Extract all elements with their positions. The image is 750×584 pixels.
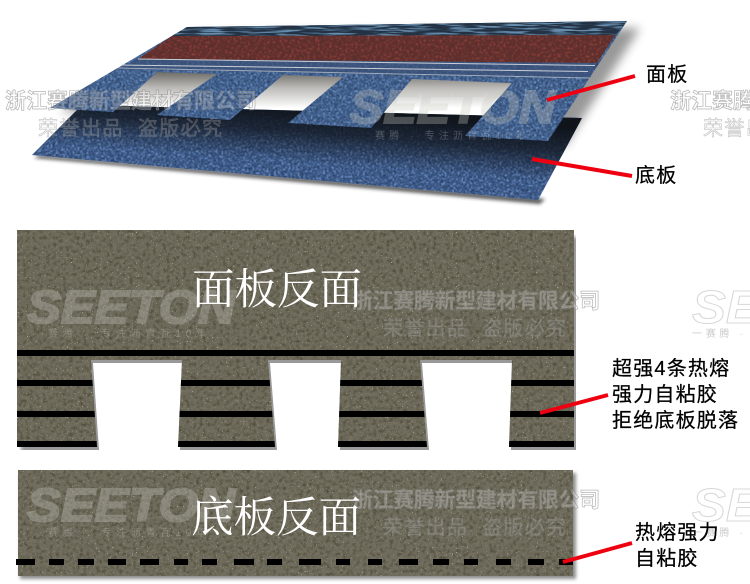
label: base sheet: 底板: [635, 164, 677, 187]
dark upper band: [172, 21, 627, 36]
panel: top sheet reverse side: [17, 230, 579, 453]
watermarks: 荣誉出品 盗版必究: [383, 516, 566, 539]
base sheet: [32, 105, 582, 204]
gap behind cut-outs: [100, 70, 520, 120]
top sheet drop shadow: [60, 28, 640, 146]
label: four adhesive strips: 拒绝底板脱落: [612, 409, 739, 432]
dashed adhesive strip: [16, 559, 573, 565]
watermarks: 荣誉出品 盗版必究: [383, 317, 566, 340]
heading: top sheet reverse: 面板反面: [192, 267, 362, 314]
panel surface: [17, 230, 574, 447]
watermarks: 浙江赛腾新型建材有限公司: [5, 89, 257, 113]
adhesive strips: [17, 350, 574, 447]
label: base adhesive: 热熔强力: [635, 521, 720, 544]
label: four adhesive strips: 超强4条热熔: [612, 357, 730, 380]
red band: [138, 35, 615, 63]
label: four adhesive strips: [612, 357, 739, 432]
panel: base sheet reverse side: [16, 470, 576, 579]
label: base adhesive: [635, 521, 720, 570]
label: four adhesive strips: 强力自粘胶: [612, 383, 718, 406]
arrow: four adhesive strips: [540, 395, 608, 413]
watermarks: SEETON: [350, 81, 556, 133]
arrow: base adhesive: [563, 543, 632, 562]
label: top sheet: 面板: [646, 63, 688, 86]
watermarks: SEETON: [27, 281, 236, 333]
blue strip below red band: [118, 59, 597, 78]
watermarks: [5, 81, 750, 539]
arrow: top sheet: [547, 76, 635, 100]
heading: base sheet reverse: 底板反面: [191, 495, 361, 542]
top illustration: layered shingle: [32, 21, 640, 204]
watermarks: 浙江赛腾新型建材有限公司: [352, 289, 600, 313]
watermarks: 荣誉出品 盗版必究: [38, 117, 222, 140]
watermarks: 浙江赛腾新型建材有限公司: [352, 488, 600, 512]
top sheet with tabs: [50, 21, 627, 141]
watermarks: 赛腾 · 专注沥青瓦10年: [375, 129, 525, 142]
light stripes: [118, 59, 595, 78]
watermarks: 赛腾 · 专注沥青瓦10年: [48, 327, 206, 340]
watermarks: 赛腾 · 专注沥青瓦10年: [48, 526, 206, 539]
label: base adhesive: 自粘胶: [635, 547, 699, 570]
watermarks: SEETON: [27, 479, 236, 531]
arrow: base sheet: [532, 159, 632, 176]
